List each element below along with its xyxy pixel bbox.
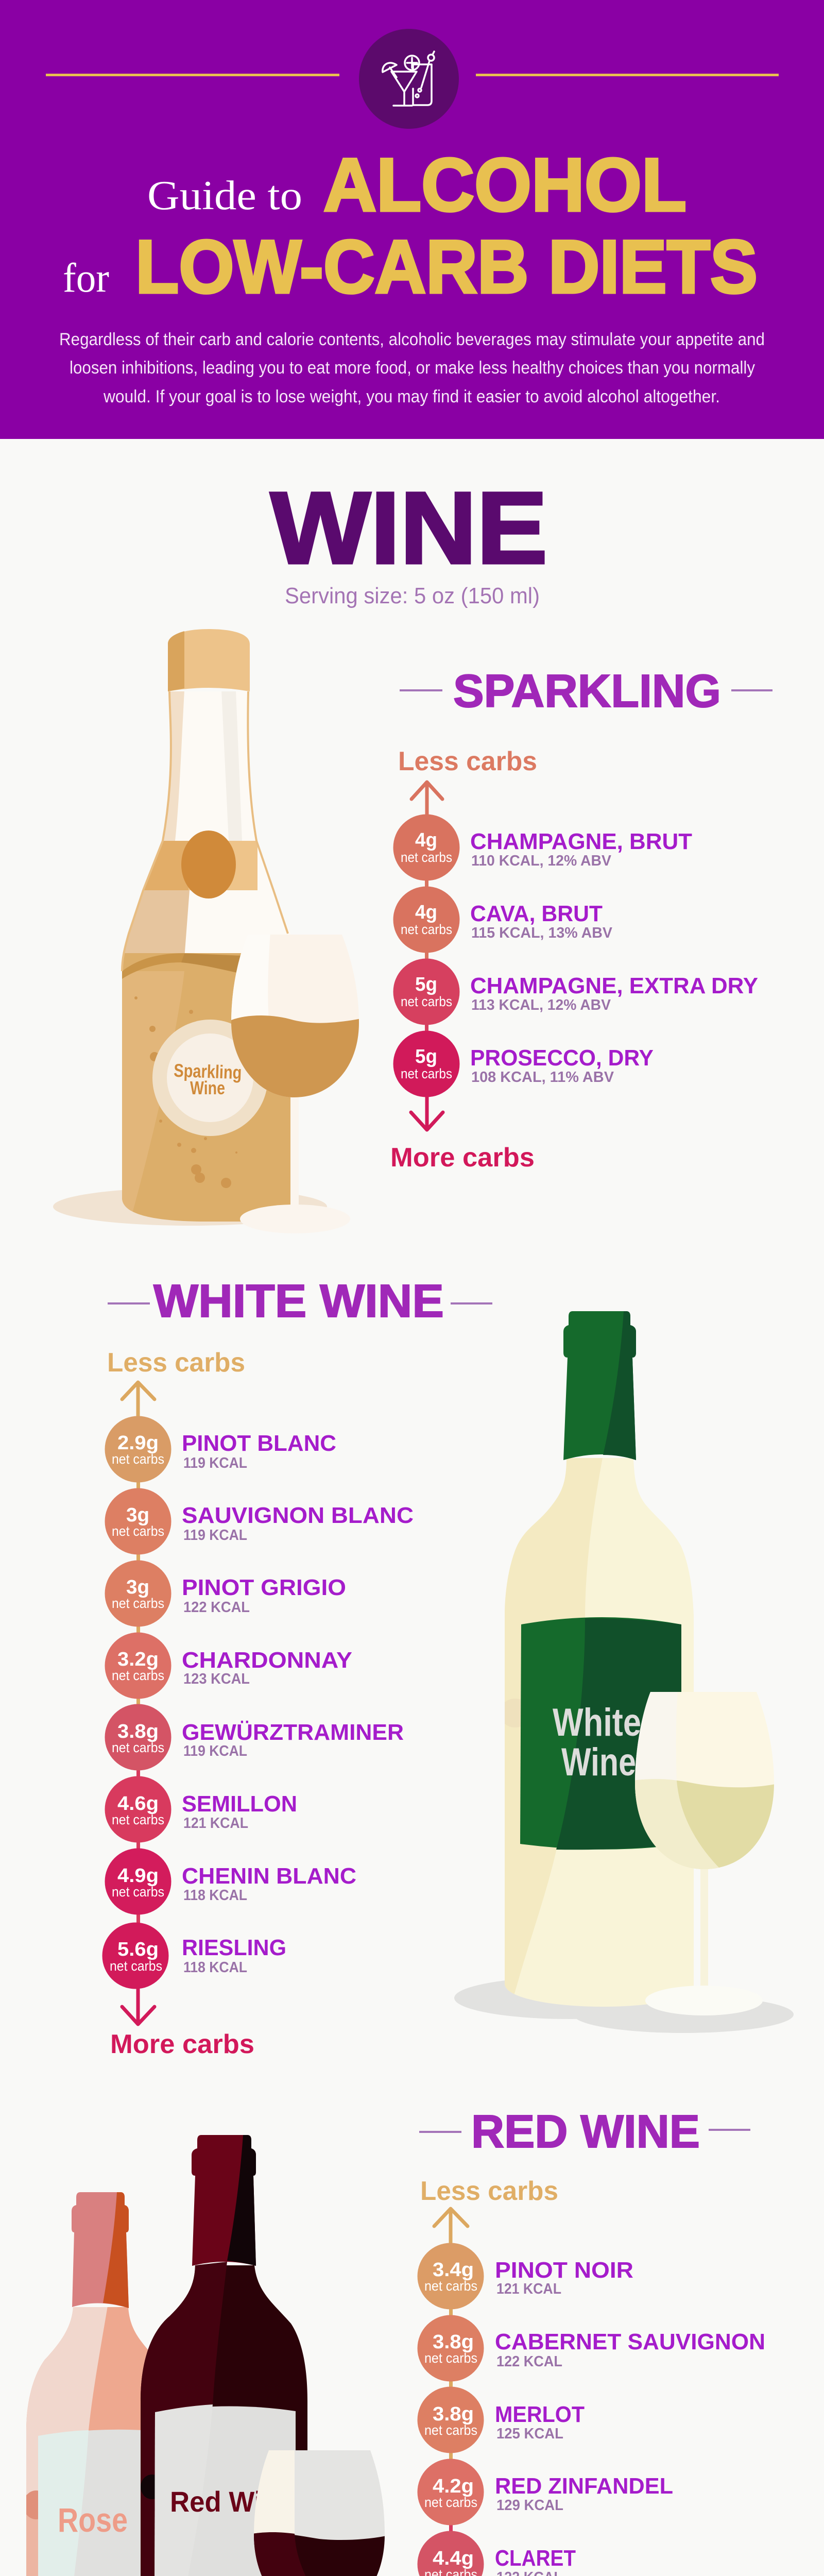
row: sauvignon blanc: 119 KCAL — [183, 1527, 247, 1544]
heading: white wine: WHITE WINE — [153, 1276, 444, 1327]
row: cabernet sauvignon — [417, 2315, 765, 2381]
row: prosecco dry: PROSECCO, DRY — [470, 1045, 654, 1071]
row: riesling: 5.6g — [117, 1939, 159, 1960]
heading: red wine: RED WINE — [471, 2106, 700, 2158]
row: cava brut: net carbs — [401, 922, 452, 937]
row: champagne extra dry: 5g — [415, 974, 437, 995]
row: red zinfandel — [417, 2459, 673, 2526]
wine glass — [633, 1690, 778, 2015]
heading: wine: WINE — [270, 471, 547, 585]
row: champagne brut: 110 KCAL, 12% ABV — [471, 853, 612, 869]
header rule right — [476, 74, 779, 76]
row: champagne brut: net carbs — [401, 850, 452, 865]
illustration: white wine bottle and glass — [454, 1311, 794, 2033]
less carbs label: Less carbs — [107, 1348, 245, 1378]
row: pinot blanc: 2.9g — [117, 1432, 159, 1454]
label: Wine — [190, 1077, 225, 1098]
serving size: Serving size: 5 oz (150 ml) — [285, 583, 540, 608]
row: champagne brut: CHAMPAGNE, BRUT — [470, 829, 692, 854]
row: champagne extra dry — [393, 958, 758, 1025]
row: cabernet sauvignon: CABERNET SAUVIGNON — [495, 2329, 765, 2354]
row: champagne brut: 4g — [415, 829, 437, 851]
row: chardonnay: CHARDONNAY — [182, 1648, 352, 1673]
illustration: rose and red wine bottles with glass — [0, 2135, 397, 2576]
row: cava brut: 4g — [415, 902, 437, 923]
label — [520, 1617, 681, 1850]
title: for — [63, 256, 109, 301]
title: ALCOHOL — [323, 143, 686, 227]
arrow down — [122, 1986, 154, 2024]
row: pinot blanc: 119 KCAL — [183, 1455, 247, 1471]
row: pinot noir — [417, 2243, 633, 2309]
panel: header — [0, 0, 824, 439]
row: prosecco dry: net carbs — [401, 1066, 452, 1081]
less carbs label: Less carbs — [398, 747, 537, 776]
row: champagne extra dry: net carbs — [401, 994, 452, 1009]
rose bottle: Rose — [58, 2501, 128, 2539]
arrow up — [411, 782, 442, 817]
row: claret — [417, 2531, 576, 2576]
row: chardonnay — [105, 1632, 352, 1699]
panel: red wine list — [417, 2106, 765, 2576]
label: White — [553, 1701, 641, 1744]
row: pinot noir: net carbs — [424, 2278, 477, 2294]
row: merlot: 3.8g — [433, 2403, 474, 2425]
row: pinot blanc: net carbs — [112, 1451, 164, 1467]
rose bottle — [23, 2192, 152, 2576]
red bottle — [141, 2135, 307, 2576]
label: Wine — [561, 1740, 636, 1784]
row: champagne extra dry: 113 KCAL, 12% ABV — [471, 997, 611, 1013]
row: gewurztraminer — [105, 1704, 404, 1770]
row: chenin blanc — [105, 1849, 356, 1914]
intro paragraph: would. If your goal is to lose weight, you may find it easier to avoid alcohol altogether. — [103, 387, 720, 406]
less carbs label: Less carbs — [420, 2176, 558, 2206]
row: sauvignon blanc: SAUVIGNON BLANC — [182, 1503, 414, 1528]
row: cava brut — [393, 886, 613, 953]
row: semillon: 121 KCAL — [183, 1815, 248, 1832]
more carbs label: More carbs — [110, 2029, 254, 2059]
panel: white wine list — [102, 1276, 492, 2059]
row: semillon: net carbs — [112, 1812, 164, 1827]
row: prosecco dry: 5g — [415, 1046, 437, 1067]
title: Guide to — [147, 173, 302, 218]
row: pinot blanc: PINOT BLANC — [182, 1431, 336, 1456]
heading: sparkling: SPARKLING — [453, 666, 721, 717]
red bottle: Red Wine — [170, 2485, 294, 2518]
row: claret: CLARET — [495, 2546, 576, 2571]
row: cabernet sauvignon: net carbs — [424, 2350, 477, 2366]
row: sauvignon blanc — [105, 1488, 414, 1555]
row: riesling — [102, 1923, 286, 1989]
row: prosecco dry — [393, 1023, 654, 1097]
row: sauvignon blanc: 3g — [126, 1504, 149, 1526]
illustration: sparkling wine bottle and glass — [53, 629, 361, 1233]
row: pinot grigio: 3g — [126, 1577, 149, 1598]
row: cabernet sauvignon: 122 KCAL — [496, 2353, 562, 2370]
arrow up — [122, 1382, 154, 1419]
panel: sparkling list — [390, 666, 772, 1173]
row: merlot — [417, 2386, 585, 2453]
row: chardonnay: 123 KCAL — [183, 1671, 250, 1687]
row: pinot noir: 3.4g — [433, 2259, 474, 2281]
row: gewurztraminer: 3.8g — [117, 1721, 159, 1742]
arrow down — [411, 1095, 443, 1130]
row: cabernet sauvignon: 3.8g — [433, 2331, 474, 2353]
row: claret: 4.4g — [433, 2548, 474, 2569]
row: red zinfandel: 129 KCAL — [496, 2497, 563, 2514]
row: red zinfandel: RED ZINFANDEL — [495, 2473, 673, 2499]
row: champagne brut — [393, 814, 692, 881]
row: gewurztraminer: GEWÜRZTRAMINER — [182, 1720, 404, 1745]
row: prosecco dry: 108 KCAL, 11% ABV — [471, 1069, 614, 1086]
label: Sparkling — [174, 1060, 242, 1083]
row: merlot: net carbs — [424, 2422, 477, 2438]
row: gewurztraminer: net carbs — [112, 1740, 164, 1755]
row: pinot grigio: 122 KCAL — [183, 1599, 250, 1616]
arrow up — [434, 2209, 468, 2246]
row: chenin blanc: CHENIN BLANC — [182, 1863, 356, 1889]
connector — [425, 876, 428, 1030]
row: pinot grigio — [105, 1560, 346, 1627]
intro paragraph: loosen inhibitions, leading you to eat more food, or make less healthy choices than you normally — [70, 358, 755, 378]
row: chenin blanc: 4.9g — [117, 1865, 159, 1887]
row: semillon — [105, 1776, 297, 1842]
row: semillon: SEMILLON — [182, 1791, 297, 1817]
row: pinot grigio: PINOT GRIGIO — [182, 1575, 346, 1600]
header rule left — [46, 74, 339, 76]
row: cava brut: CAVA, BRUT — [470, 901, 603, 926]
title: LOW-CARB DIETS — [135, 225, 758, 309]
row: pinot noir: PINOT NOIR — [495, 2258, 633, 2283]
row: red zinfandel: 4.2g — [433, 2476, 474, 2497]
row: chenin blanc: 118 KCAL — [183, 1887, 247, 1904]
row: cava brut: 115 KCAL, 13% ABV — [471, 925, 613, 941]
label — [152, 1020, 268, 1136]
row: chenin blanc: net carbs — [112, 1884, 164, 1900]
more carbs label: More carbs — [390, 1143, 535, 1173]
row: riesling: RIESLING — [182, 1935, 286, 1960]
intro paragraph: Regardless of their carb and calorie contents, alcoholic beverages may stimulate your appetite and — [59, 330, 765, 349]
row: chardonnay: net carbs — [112, 1668, 164, 1683]
row: riesling: net carbs — [110, 1958, 162, 1974]
row: champagne extra dry: CHAMPAGNE, EXTRA DRY — [470, 973, 758, 998]
row: merlot: 125 KCAL — [496, 2426, 563, 2442]
title — [63, 143, 758, 309]
wine glass — [229, 933, 361, 1233]
row: pinot grigio: net carbs — [112, 1596, 164, 1611]
row: sauvignon blanc: net carbs — [112, 1523, 164, 1539]
icon: cocktail badge — [359, 29, 459, 129]
row: pinot blanc — [105, 1416, 336, 1483]
row: chardonnay: 3.2g — [117, 1649, 159, 1670]
intro paragraph — [59, 330, 765, 406]
connector — [136, 1479, 140, 1963]
row: gewurztraminer: 119 KCAL — [183, 1743, 247, 1759]
row: semillon: 4.6g — [117, 1793, 159, 1815]
row: riesling: 118 KCAL — [183, 1959, 247, 1976]
row: red zinfandel: net carbs — [424, 2495, 477, 2510]
wine glass — [252, 2447, 386, 2576]
row: merlot: MERLOT — [495, 2402, 585, 2427]
row: pinot noir: 121 KCAL — [496, 2281, 561, 2297]
connector — [449, 2303, 453, 2576]
